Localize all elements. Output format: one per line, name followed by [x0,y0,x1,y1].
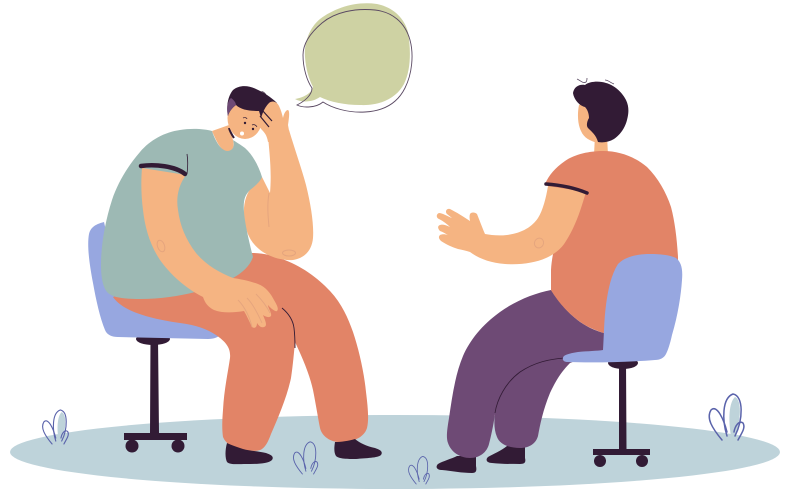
left man sleeve band [141,165,185,174]
left man raised arm crease [268,193,269,227]
left man arm elbow mark [156,239,166,253]
ground ellipse [10,415,780,489]
right man trousers [447,290,604,458]
left man shoes [226,439,382,464]
plant: far right [709,394,744,440]
left man front arm and hand [141,168,278,328]
left man raised hand [260,102,290,142]
right man sleeve band [546,184,587,193]
right man shirt [545,151,678,335]
left man sleeve fold [186,154,189,174]
left man elbow mark [282,250,296,256]
left chair [88,222,221,452]
plant: under left man [293,442,318,474]
left man head [227,86,277,139]
speech bubble [295,3,412,112]
plant: centre bottom [409,456,429,484]
left man trousers [113,253,368,451]
left man collar shadow [229,128,234,138]
left man raised arm, back [244,130,313,260]
right man arm and hand [437,186,586,264]
left man with chair [88,86,382,464]
right chair [563,254,682,467]
right man head [573,78,628,143]
right man shoes [437,446,525,473]
left man shirt [101,129,262,299]
right man neck [594,135,608,155]
right man with chair [437,78,682,473]
left man neck [212,125,234,152]
plant: far left [43,410,68,444]
right man elbow mark [533,237,545,249]
